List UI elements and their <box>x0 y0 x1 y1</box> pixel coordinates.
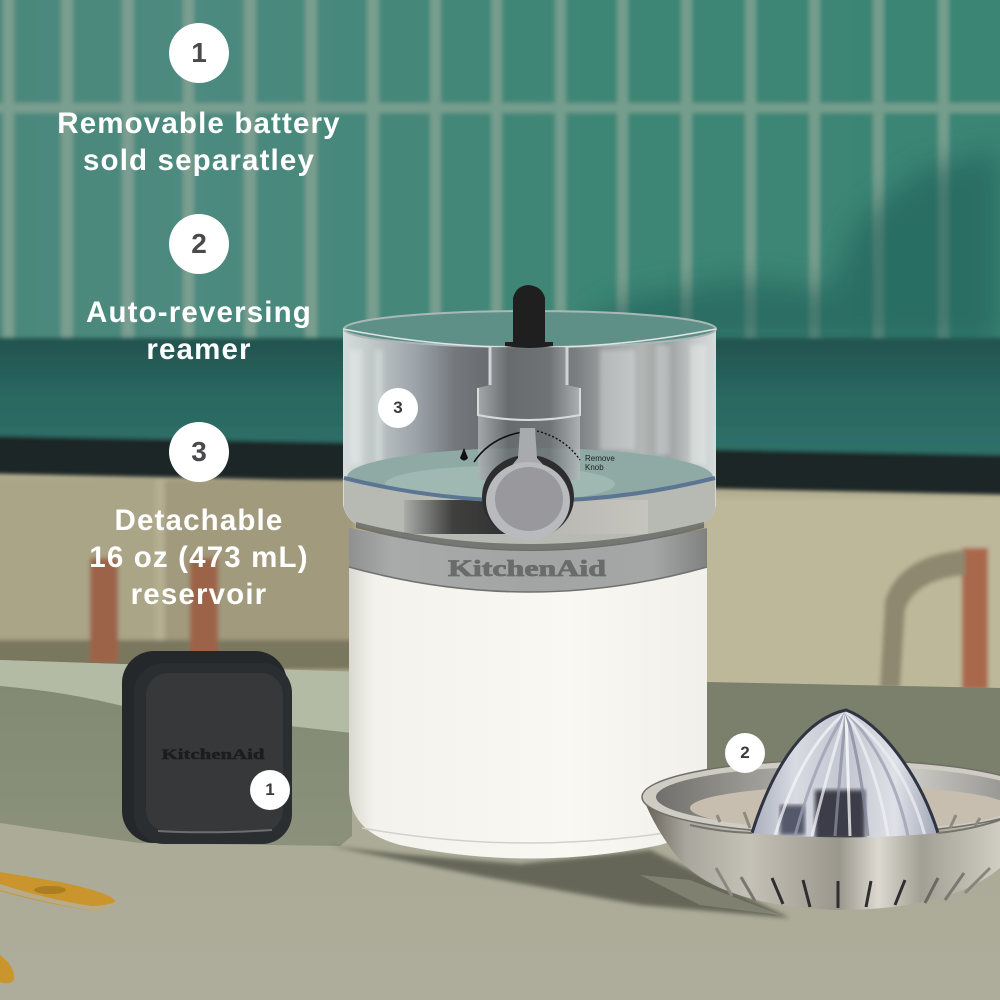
black drive shaft <box>505 285 553 348</box>
marker 1 on battery <box>250 770 290 810</box>
battery logo: KitchenAid <box>162 747 265 763</box>
arrows and remove knob label <box>460 431 615 472</box>
glass streaks <box>350 345 706 465</box>
marker 2 on reamer <box>725 733 765 773</box>
callout 1 caption <box>57 107 341 177</box>
arrows and remove knob label: Knob <box>585 463 604 472</box>
juicer reamer <box>642 705 1000 910</box>
bowl slots <box>716 868 990 908</box>
marker 3 on reservoir <box>378 388 418 428</box>
table top <box>0 660 1000 1000</box>
glass cone <box>754 712 936 838</box>
arrows and remove knob label: Remove <box>585 454 615 463</box>
yellow utensil <box>0 872 115 983</box>
wall tiles <box>0 0 1000 345</box>
top rim opening <box>344 311 716 347</box>
marker 1 on battery: 1 <box>265 780 275 799</box>
callout 1 caption: sold separatley <box>83 144 315 177</box>
marker 2 on reamer: 2 <box>740 743 750 762</box>
callout 3 number <box>169 422 229 482</box>
callout 2 caption: Auto-reversing <box>86 296 312 329</box>
callout 3 number: 3 <box>191 436 207 467</box>
detachable reservoir <box>343 285 716 551</box>
marker 3 on reservoir: 3 <box>393 398 403 417</box>
callout 1 number: 1 <box>191 37 207 68</box>
soft shadow on wall <box>560 150 1000 345</box>
reservoir knob <box>482 428 574 540</box>
lower clear section <box>344 478 715 550</box>
callout 1 number <box>169 23 229 83</box>
callout 3 caption: Detachable <box>115 504 283 537</box>
inner plate <box>347 448 713 506</box>
callout 2 number: 2 <box>191 228 207 259</box>
central column <box>478 347 580 480</box>
callout 2 caption <box>86 296 312 366</box>
cabinets <box>0 474 1000 695</box>
callout 2 caption: reamer <box>146 333 252 366</box>
callout 2 number <box>169 214 229 274</box>
appliance base <box>349 528 707 858</box>
callout 3 caption: 16 oz (473 mL) <box>89 541 309 574</box>
callout 3 caption <box>89 504 309 611</box>
dark counter band and black stripe <box>0 338 1000 497</box>
callout 1 caption: Removable battery <box>57 107 341 140</box>
battery <box>122 651 292 844</box>
KitchenAid logo on band: KitchenAid <box>448 556 606 581</box>
callout 3 caption: reservoir <box>131 578 267 611</box>
